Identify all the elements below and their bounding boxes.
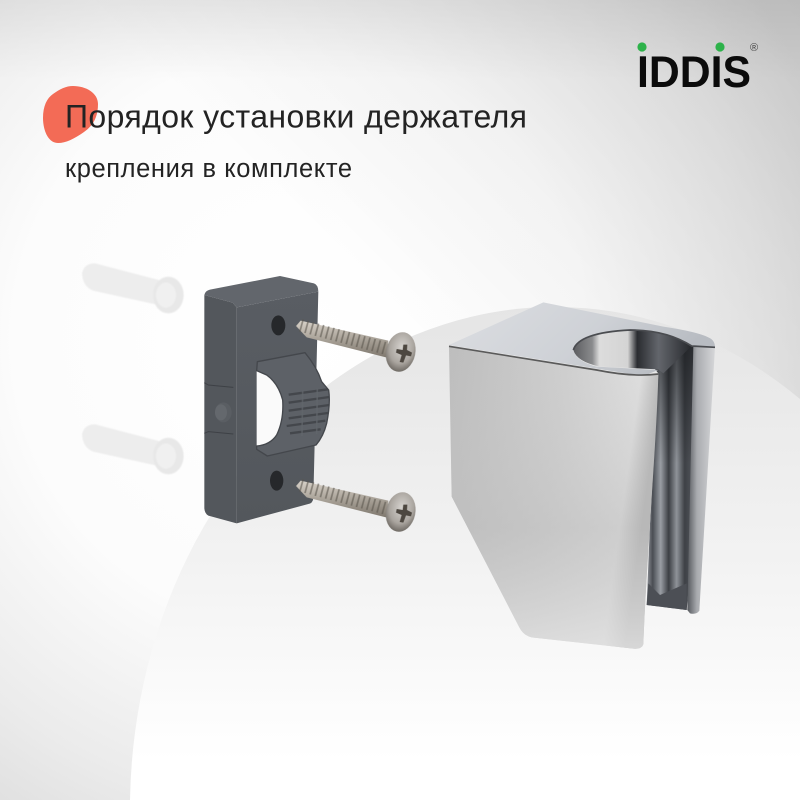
holder bore [573, 330, 692, 373]
plate side face [204, 295, 237, 523]
screws [296, 321, 419, 535]
plate top face [204, 276, 318, 307]
plate front face [237, 292, 318, 523]
logo dot left [637, 42, 647, 52]
holder right lip [687, 347, 715, 614]
mounting plate [204, 276, 329, 523]
clip knurl breaks [302, 389, 317, 436]
chrome holder [449, 302, 715, 649]
holder top face [449, 302, 715, 376]
side pin [215, 402, 232, 422]
logo: IDDIS: IDDIS [637, 48, 751, 97]
wall anchors [82, 263, 184, 474]
logo dot right [715, 42, 725, 52]
subtitle: крепления в комплекте [65, 155, 352, 183]
holder channel bottom reflection [647, 583, 687, 610]
anchor bottom [82, 424, 184, 474]
holder channel upper shadow [630, 337, 697, 463]
plate notch lines [204, 383, 233, 434]
title: Порядок установки держателя [65, 98, 527, 134]
large pale circle behind product [130, 307, 800, 800]
anchor top [82, 263, 184, 313]
holder top edge highlight [449, 346, 658, 375]
screw top [296, 321, 419, 375]
registered mark: ® [750, 42, 758, 54]
hole top [271, 315, 285, 335]
screw bottom [296, 481, 419, 535]
holder front face [449, 347, 658, 649]
window [257, 371, 290, 447]
holder bore rim [573, 330, 715, 350]
hole bottom [270, 471, 283, 491]
holder inner channel [630, 337, 697, 610]
clip [257, 353, 329, 456]
accent blob [43, 86, 98, 143]
clip knurl [287, 389, 329, 433]
